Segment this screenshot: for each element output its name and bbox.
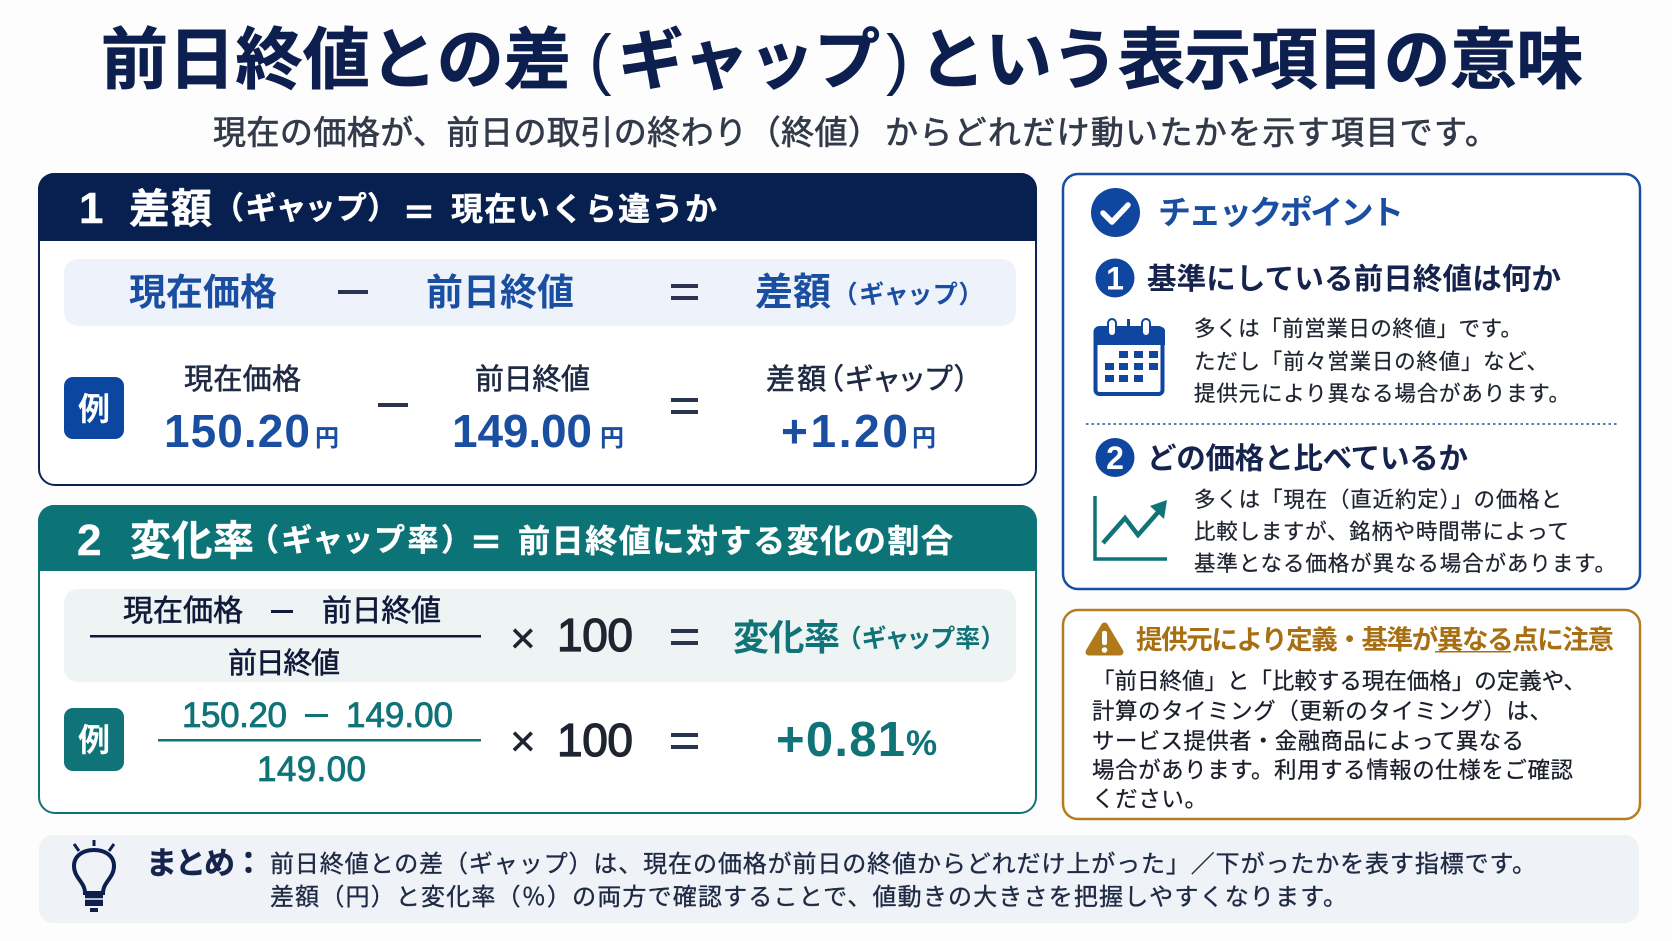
summary label: まとめ： bbox=[146, 846, 264, 881]
formula band: 変化率: （ギャップ率） bbox=[848, 625, 994, 653]
example badge: 例 bbox=[78, 722, 110, 758]
icon: line chart bbox=[1095, 496, 1167, 559]
panel 1 heading bbox=[79, 184, 717, 233]
title: という表示項目の意味 bbox=[919, 24, 1583, 98]
warning body bbox=[1092, 669, 1586, 812]
example: previous close: 前日終値 bbox=[475, 363, 590, 396]
multiplier bbox=[510, 714, 633, 766]
panel: まとめ bbox=[39, 835, 1639, 923]
title: 前日終値との差 bbox=[101, 23, 571, 98]
example: gap result: 差額（ギャップ） bbox=[766, 363, 969, 396]
example fraction: 149.00 bbox=[346, 696, 453, 735]
icon: calendar bbox=[1094, 319, 1165, 394]
point 2 heading: どの価格と比べているか bbox=[1147, 442, 1468, 476]
example: current price: 現在価格 bbox=[184, 363, 301, 396]
panel 2 heading bbox=[77, 516, 953, 565]
formula band: 変化率: 現在価格 bbox=[123, 595, 243, 628]
summary text: 前日終値との差（ギャップ）は、現在の価格が前日の終値からどれだけ上がった」／下がったかを表す指標です。 bbox=[270, 851, 1536, 878]
example result: +0.81 bbox=[776, 713, 905, 767]
icon: warning triangle bbox=[1089, 626, 1120, 653]
icon: check circle bbox=[1091, 188, 1140, 237]
equals sign bbox=[671, 733, 698, 749]
equals sign bbox=[671, 398, 698, 414]
formula band: 変化率: 変化率 bbox=[733, 617, 840, 658]
warning heading: 提供元により定義・基準が異なる点に注意 bbox=[1136, 625, 1614, 655]
point 1 body: ただし「前々営業日の終値」など、 bbox=[1194, 350, 1548, 374]
example badge bbox=[64, 708, 124, 771]
point 2 body: 基準となる価格が異なる場合があります。 bbox=[1194, 552, 1616, 576]
example: gap result: +1.20 bbox=[781, 405, 908, 457]
panel: 変化率 bbox=[38, 505, 1037, 813]
example: gap result bbox=[766, 363, 969, 457]
formula band: 変化率: × bbox=[510, 614, 536, 663]
panel 2 heading: （ギャップ率） bbox=[262, 523, 458, 558]
example: gap result: 円 bbox=[912, 425, 936, 452]
badge 1: 1 bbox=[1106, 260, 1124, 296]
panel 2 heading: 前日終値に対する変化の割合 bbox=[518, 523, 953, 559]
title: ( bbox=[589, 21, 612, 97]
subtitle bbox=[213, 114, 1498, 151]
point 1 body: 提供元により異なる場合があります。 bbox=[1194, 382, 1570, 406]
panel: 差額 bbox=[38, 173, 1037, 485]
formula band: 差額: 差額 bbox=[755, 272, 831, 314]
example: current price bbox=[164, 363, 339, 457]
panel 1 header bar bbox=[38, 173, 1037, 241]
formula band: 変化率 bbox=[64, 589, 1016, 682]
panel 2 header bar bbox=[38, 505, 1037, 571]
warning body: サービス提供者・金融商品によって異なる bbox=[1092, 729, 1524, 754]
example: current price: 150.20 bbox=[164, 405, 310, 457]
example badge bbox=[64, 377, 124, 439]
example result: % bbox=[906, 724, 937, 763]
warning body: 「前日終値」と「比較する現在価格」の定義や、 bbox=[1092, 669, 1586, 694]
minus sign bbox=[378, 403, 408, 407]
panel 1 heading: 1 bbox=[79, 184, 103, 233]
warning body: 場合があります。利用する情報の仕様をご確認 bbox=[1092, 758, 1573, 783]
checkpoint heading: チェックポイント bbox=[1158, 194, 1404, 231]
formula band: 変化率: 前日終値 bbox=[322, 595, 441, 628]
panel 1 heading: 現在いくら違うか bbox=[451, 191, 717, 227]
subtitle: 現在の価格が、前日の取引の終わり（終値） bbox=[213, 114, 881, 151]
point 1 body bbox=[1194, 317, 1570, 406]
example fraction: 150.20 bbox=[182, 696, 287, 735]
title: ) bbox=[886, 21, 909, 97]
point 2 body bbox=[1194, 488, 1616, 576]
formula band: 差額: 現在価格 bbox=[129, 272, 277, 313]
point 2 body: 多くは「現在（直近約定）」の価格と bbox=[1194, 488, 1562, 512]
summary text: 差額（円）と変化率（％）の両方で確認することで、値動きの大きさを把握しやすくなります。 bbox=[270, 884, 1347, 911]
panel: 注意 bbox=[1063, 610, 1640, 819]
badge 2 bbox=[1096, 438, 1134, 477]
point 1 heading: 基準にしている前日終値は何か bbox=[1147, 263, 1561, 296]
warning body: 計算のタイミング（更新のタイミング）は、 bbox=[1092, 699, 1552, 724]
panel 1 heading: 差額 bbox=[129, 186, 212, 232]
subtitle: からどれだけ動いたかを示す項目です。 bbox=[885, 114, 1498, 151]
example badge: 例 bbox=[78, 391, 110, 427]
example fraction bbox=[158, 696, 481, 789]
formula band: 変化率: 前日終値 bbox=[228, 647, 340, 680]
example fraction: 149.00 bbox=[257, 750, 366, 789]
example: current price: 円 bbox=[315, 425, 339, 452]
example: previous close: 149.00 bbox=[452, 405, 592, 457]
formula band: 変化率: 100 bbox=[557, 609, 633, 661]
point 2 body: 比較しますが、銘柄や時間帯によって bbox=[1194, 520, 1569, 544]
formula band: 差額: （ギャップ） bbox=[844, 281, 972, 309]
summary text bbox=[270, 851, 1536, 911]
formula band: 差額: 前日終値 bbox=[426, 272, 574, 313]
multiplier: × bbox=[510, 717, 536, 766]
panel 2 heading: 2 bbox=[77, 516, 101, 565]
title bbox=[101, 21, 1583, 98]
formula band: 差額 bbox=[64, 259, 1016, 326]
badge 1 bbox=[1096, 258, 1134, 298]
example: previous close: 円 bbox=[600, 425, 624, 452]
panel 1 heading: （ギャップ） bbox=[227, 191, 384, 226]
example: previous close bbox=[452, 363, 624, 457]
badge 2: 2 bbox=[1106, 440, 1124, 476]
multiplier: 100 bbox=[557, 714, 633, 766]
panel 2 heading: 変化率 bbox=[130, 518, 254, 564]
icon: light bulb bbox=[74, 840, 114, 910]
warning body: ください。 bbox=[1092, 787, 1207, 812]
point 1 body: 多くは「前営業日の終値」です。 bbox=[1194, 317, 1522, 341]
title: ギャップ bbox=[618, 23, 880, 97]
panel: チェックポイント bbox=[1063, 174, 1640, 589]
